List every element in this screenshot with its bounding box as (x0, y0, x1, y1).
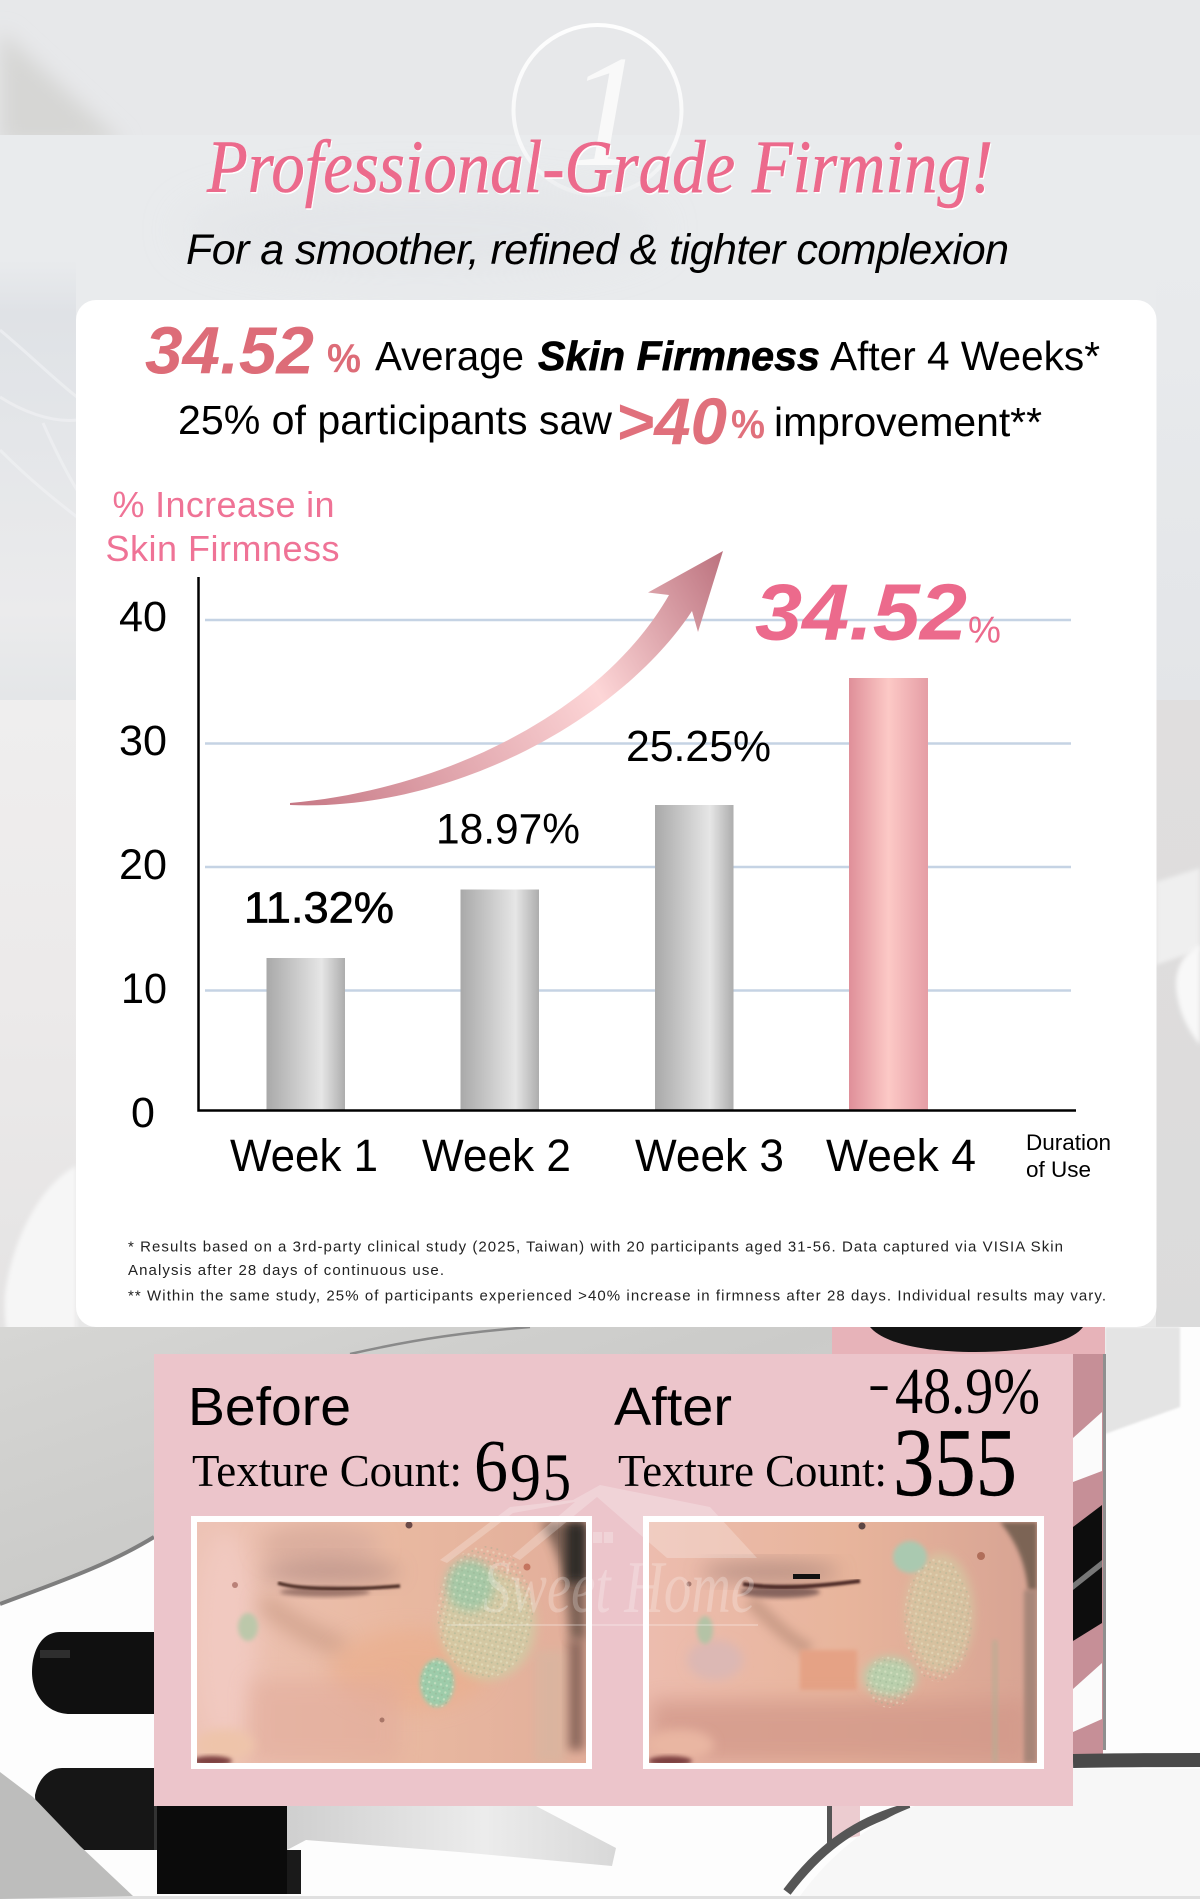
background: dropper and cloth (0, 1632, 1200, 1899)
photo: after face (643, 1516, 1044, 1769)
x axis title: Duration (1026, 1130, 1111, 1155)
axes (198, 577, 1076, 1110)
step number 1 badge (514, 22, 682, 200)
footnotes: Analysis after 28 days of continuous use. (128, 1262, 444, 1279)
watermark: Sweet Home (440, 1485, 758, 1629)
headline: participants: >40 (616, 384, 727, 458)
before texture count: 6 (474, 1426, 508, 1508)
value labels: 25.25% (626, 722, 771, 771)
bar: week 3 (655, 805, 734, 1110)
x axis labels: Week 4 (826, 1130, 976, 1181)
black dash mark (793, 1574, 820, 1579)
before texture count (192, 1426, 571, 1515)
headline: average firmness: After 4 Weeks* (830, 333, 1100, 379)
bar: week 1 (266, 958, 345, 1110)
x axis labels (230, 1130, 976, 1181)
panel: chart card (76, 300, 1156, 1327)
headline: average firmness: % (327, 335, 361, 381)
x axis labels: Week 2 (422, 1130, 571, 1181)
y axis labels: 20 (119, 841, 167, 889)
background: serum jar (827, 1327, 1106, 1846)
footnotes (128, 1238, 1106, 1304)
footnotes: ** Within the same study, 25% of participants experienced >40% increase in firmness after 28 days. Individual results may vary. (128, 1288, 1106, 1304)
value labels (244, 722, 771, 932)
x axis labels: Week 3 (635, 1130, 784, 1181)
x axis title: of Use (1026, 1157, 1091, 1182)
percent change: - (868, 1355, 890, 1411)
title: Professional-Grade Firming! (206, 126, 993, 209)
footnotes: * Results based on a 3rd-party clinical study (2025, Taiwan) with 20 participants aged 31-56. Data captured via VISIA Skin (128, 1238, 1063, 1256)
arrow: upward trend (290, 551, 723, 805)
x axis labels: Week 1 (230, 1130, 378, 1181)
headline: participants: 25% of participants saw (178, 397, 612, 443)
percent change: 48.9% (895, 1355, 1040, 1428)
highlighted value: 34.52 (755, 568, 967, 656)
y axis title: % Increase in (112, 484, 334, 525)
panel: before and after (154, 1354, 1073, 1806)
highlighted value: % (968, 610, 1001, 650)
value labels: 18.97% (436, 806, 580, 854)
after texture count (618, 1409, 1017, 1517)
headline: average firmness: Average (375, 333, 524, 379)
before texture count: 9 (510, 1439, 541, 1515)
y axis labels: 0 (131, 1089, 155, 1137)
photo: before face (191, 1516, 592, 1769)
y axis labels: 30 (119, 717, 167, 765)
after texture count: Texture Count: (618, 1446, 887, 1496)
y axis title: Skin Firmness (106, 528, 340, 569)
bar chart (119, 551, 1111, 1182)
y axis labels: 40 (119, 593, 167, 641)
watermark: Sweet Home: Sweet Home (483, 1547, 755, 1629)
y axis labels: 10 (121, 965, 167, 1013)
step number 1 badge: 1 (566, 22, 646, 200)
headline: average firmness (145, 314, 1100, 388)
x axis title (1026, 1130, 1111, 1182)
headline: average firmness: 34.52 (145, 314, 314, 388)
headline: participants: improvement** (774, 399, 1042, 445)
bar: week 2 (460, 890, 539, 1110)
headline: participants (178, 384, 1042, 458)
after heading: After (614, 1377, 732, 1437)
y axis title (106, 484, 340, 569)
bar: week 4 (849, 678, 928, 1110)
subtitle: For a smoother, refined & tighter complexion (186, 226, 1009, 274)
title: Professional-Grade Firming! (207, 128, 994, 210)
after texture count: 355 (893, 1409, 1017, 1517)
before texture count: 5 (543, 1439, 571, 1515)
before heading: Before (188, 1377, 351, 1437)
value labels: 11.32% (244, 884, 394, 932)
before texture count: Texture Count: (192, 1446, 462, 1496)
y axis labels (119, 593, 167, 1137)
headline: participants: % (731, 401, 765, 447)
headline: average firmness: Skin Firmness (538, 333, 820, 379)
